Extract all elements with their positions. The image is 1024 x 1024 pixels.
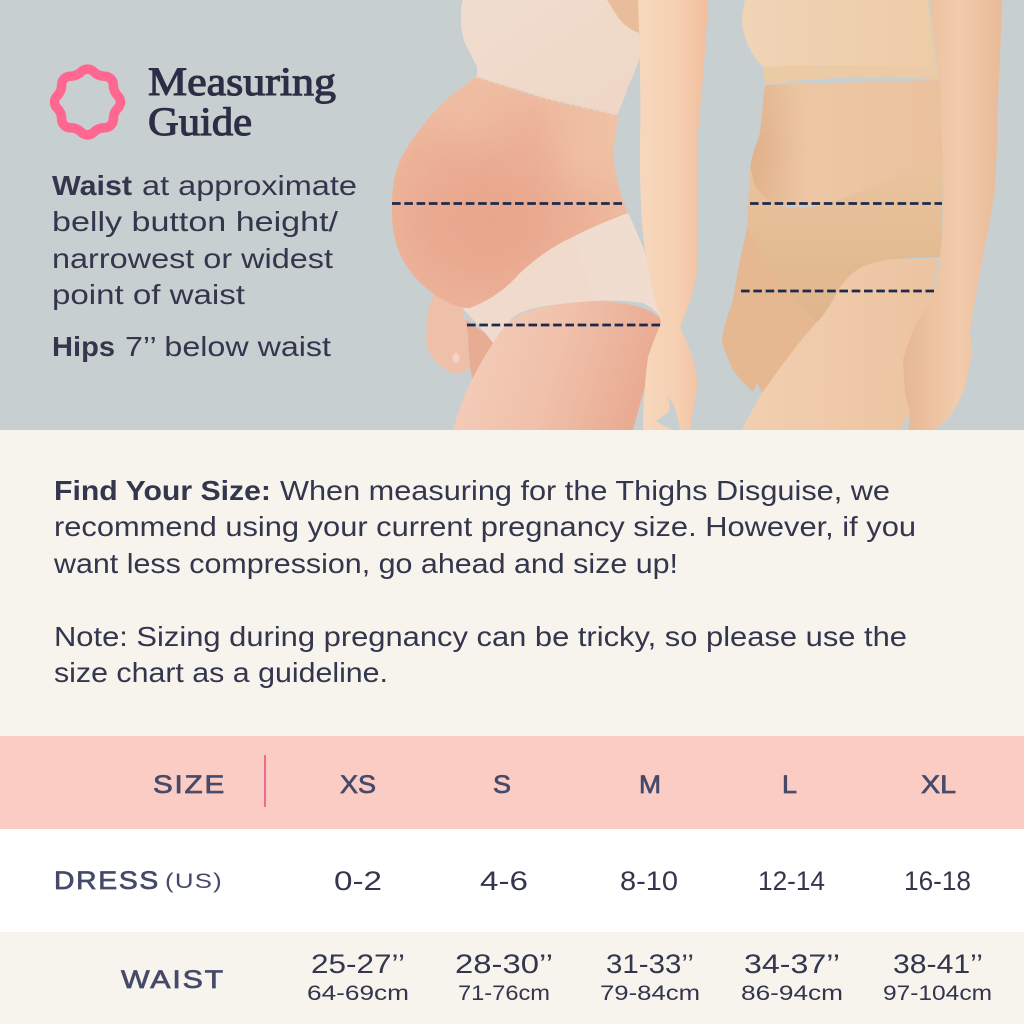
table: size chart — [0, 736, 1024, 1024]
title: Measuring Guide: Measuring — [148, 59, 336, 104]
table row: waist: 28-30’’ — [455, 949, 553, 979]
table row: waist: 31-33’’ — [606, 949, 694, 979]
thigh — [453, 301, 662, 430]
text block: sizing note: size chart as a guideline. — [54, 657, 388, 688]
text block: waist instructions: at approximate — [142, 170, 357, 201]
table row: waist: WAIST — [121, 966, 225, 994]
illustration: non-pregnant model — [722, 0, 1002, 430]
table row: size header — [0, 736, 1024, 829]
measurement lines: dashed waist and hip lines — [392, 204, 942, 325]
title: Measuring Guide — [148, 59, 336, 144]
text block: waist instructions: Waist — [52, 170, 132, 201]
table row: waist — [0, 932, 1024, 1024]
torso and belly — [392, 77, 628, 308]
torso shading — [741, 110, 769, 190]
underwear — [747, 163, 943, 322]
underwear side shading — [573, 213, 662, 320]
table row: waist: 25-27’’ — [311, 949, 405, 979]
text block: hips instructions: 7’’ below waist — [125, 331, 331, 362]
arm and hand — [638, 0, 708, 430]
table row: waist: 38-41’’ — [893, 949, 983, 979]
title: Measuring Guide: Guide — [148, 99, 252, 144]
back leg and left hand — [722, 227, 817, 393]
table row: waist: 97-104cm — [883, 982, 992, 1005]
belly shading — [571, 147, 592, 168]
thigh — [742, 260, 938, 430]
text block: find your size: recommend using your current pregnancy size. However, if you — [54, 511, 916, 542]
table row: dress size — [0, 829, 1024, 932]
text block: sizing note: Note: Sizing during pregnancy can be tricky, so please use the — [54, 621, 907, 652]
table row: size header: SIZE — [153, 771, 226, 799]
panel: find your size background — [0, 430, 1024, 736]
table row: waist: 64-69cm — [307, 982, 409, 1005]
text block: waist instructions: point of waist — [52, 279, 245, 310]
bra — [742, 0, 938, 85]
table row: size header: XS — [340, 771, 376, 799]
text block: find your size: want less compression, go ahead and size up! — [53, 548, 678, 579]
back leg — [466, 320, 495, 382]
text block: find your size: Find Your Size: — [54, 475, 271, 506]
text block: hips instructions — [52, 331, 331, 362]
arm and hand — [903, 0, 1002, 430]
gap between fingers — [656, 396, 680, 430]
panel: measuring guide background — [0, 0, 1024, 430]
table row: dress size: 12-14 — [758, 866, 825, 896]
torso — [750, 80, 945, 205]
table row: waist: 86-94cm — [741, 982, 843, 1005]
text block: sizing note — [54, 621, 907, 688]
bra scalloped hem — [477, 77, 617, 115]
table row: size header: S — [493, 771, 511, 799]
text block: find your size: When measuring for the Thighs Disguise, we — [280, 475, 890, 506]
text block: find your size — [53, 475, 916, 579]
bra — [461, 0, 640, 115]
armpit skin — [605, 0, 640, 40]
table row: dress size: 16-18 — [904, 866, 971, 896]
table row: size header: M — [639, 771, 661, 799]
table row: dress size: DRESS — [54, 867, 160, 895]
icon: pink scalloped flower ring — [55, 69, 120, 135]
text block: waist instructions: belly button height/ — [52, 206, 338, 237]
table row: dress size: 8-10 — [620, 866, 678, 896]
fingernail — [452, 353, 460, 363]
underwear — [462, 213, 662, 343]
table row: dress size: (US) — [165, 870, 223, 893]
bra band shading — [763, 65, 938, 85]
text block: waist instructions — [52, 170, 357, 310]
left hand — [426, 293, 469, 374]
text block: waist instructions: narrowest or widest — [52, 243, 333, 274]
text block: hips instructions: Hips — [52, 331, 115, 362]
table row: waist: 34-37’’ — [744, 949, 840, 979]
table row: waist: 79-84cm — [600, 982, 700, 1005]
table row: size header: L — [782, 771, 797, 799]
table row: size header: XL — [921, 771, 956, 799]
table row: waist: 71-76cm — [458, 982, 550, 1005]
table row: dress size: 4-6 — [480, 866, 528, 896]
table row: dress size: 0-2 — [334, 866, 382, 896]
illustration: pregnant model — [392, 0, 708, 430]
